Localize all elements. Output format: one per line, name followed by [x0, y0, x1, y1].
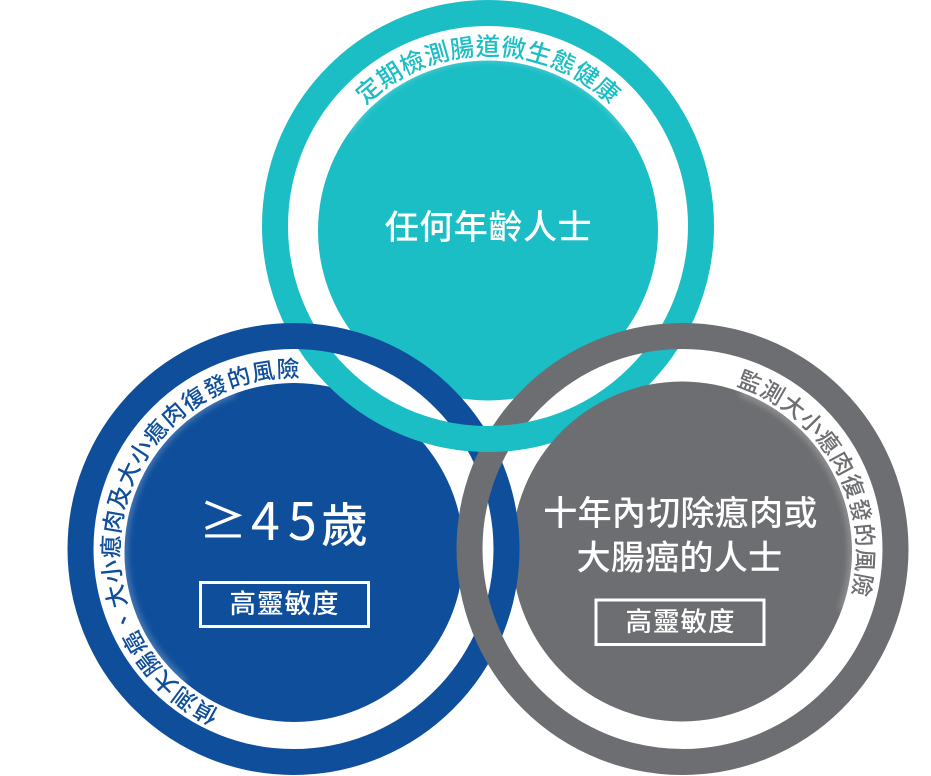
badge: high sensitivity, gray: 高靈敏度	[626, 600, 736, 639]
heading: polyp or colorectal cancer removal in ten years: 大腸癌的人士	[577, 530, 782, 580]
badge: high sensitivity, blue: 高靈敏度	[230, 582, 340, 621]
gray disc	[512, 382, 852, 722]
heading: age 45 and over: 4	[251, 480, 280, 555]
curved label: blue ring: 偵測大腸癌、大小瘜肉及大小瘜肉復發的風險	[100, 358, 299, 725]
blue disc	[124, 383, 463, 722]
badge: high sensitivity, blue	[200, 582, 368, 626]
heading: polyp or colorectal cancer removal in ten years: 十年內切除瘜肉或	[543, 486, 818, 535]
blue ring	[80, 336, 506, 762]
badge: high sensitivity, gray	[596, 600, 764, 644]
heading: any age: 任何年齡人士	[385, 200, 592, 249]
teal ring	[275, 13, 701, 439]
curved label: gray ring: 監測大小瘜肉復發的風險	[736, 368, 876, 597]
curved label: teal ring: 定期檢測腸道微生態健康	[354, 34, 622, 105]
heading: age 45 and over: ≥	[199, 482, 247, 552]
heading: age 45 and over: 歲	[321, 487, 368, 556]
teal ring crossing over the blue and gray rings	[420, 414, 545, 452]
heading: age 45 and over: 5	[288, 480, 317, 555]
gray ring	[470, 336, 896, 762]
teal disc	[318, 58, 658, 401]
heading: polyp or colorectal cancer removal in ten years	[543, 486, 818, 580]
